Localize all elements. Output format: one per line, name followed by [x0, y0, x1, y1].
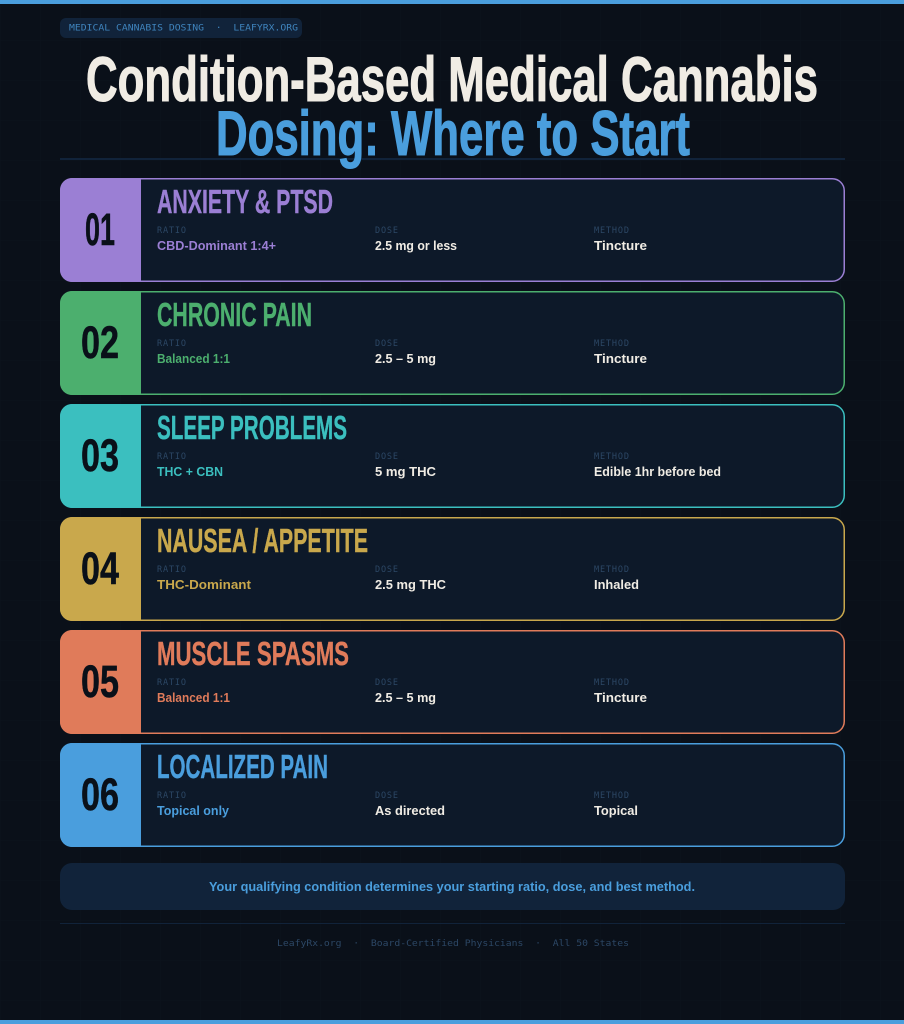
- panel: anxiety & ptsd: RATIO: [157, 226, 186, 236]
- panel: muscle spasms: Balanced 1:1: [157, 690, 230, 705]
- panel: muscle spasms: DOSE: [375, 678, 398, 688]
- panel: chronic pain: METHOD: [594, 339, 629, 349]
- panel: anxiety & ptsd: 01: [85, 204, 115, 255]
- panel: sleep problems: [60, 404, 844, 508]
- header tag pill: [60, 18, 302, 38]
- panel: nausea / appetite: [60, 517, 844, 621]
- panel: muscle spasms: Tincture: [594, 690, 647, 705]
- panel: localized pain: Topical only: [157, 803, 230, 818]
- panel: sleep problems: METHOD: [594, 452, 629, 462]
- panel: muscle spasms: METHOD: [594, 678, 629, 688]
- panel: anxiety & ptsd: ANXIETY & PTSD: [157, 184, 333, 221]
- panel: anxiety & ptsd: 2.5 mg or less: [375, 238, 457, 253]
- panel: chronic pain: CHRONIC PAIN: [157, 297, 312, 334]
- panel: localized pain: Topical: [594, 803, 638, 818]
- panel: sleep problems: THC + CBN: [157, 464, 223, 479]
- panel: muscle spasms: [60, 630, 844, 734]
- panel: chronic pain: Tincture: [594, 351, 647, 366]
- panel: chronic pain: DOSE: [375, 339, 398, 349]
- panel: chronic pain: [60, 291, 844, 395]
- title: Dosing: Where to Start: [216, 99, 690, 169]
- panel: sleep problems: DOSE: [375, 452, 398, 462]
- panel: chronic pain: 2.5 – 5 mg: [375, 351, 436, 366]
- footer: LeafyRx.org · Board-Certified Physicians · All 50 States: [277, 939, 629, 949]
- title: [86, 45, 818, 169]
- panel: nausea / appetite: NAUSEA / APPETITE: [157, 523, 368, 560]
- callout: [60, 863, 845, 910]
- panel: localized pain: METHOD: [594, 791, 629, 801]
- panel: nausea / appetite: THC-Dominant: [157, 577, 252, 592]
- panel: chronic pain: 02: [81, 317, 119, 368]
- panel: nausea / appetite: 2.5 mg THC: [375, 577, 446, 592]
- panel: nausea / appetite: METHOD: [594, 565, 629, 575]
- panel: nausea / appetite: DOSE: [375, 565, 398, 575]
- panel: localized pain: [60, 743, 844, 847]
- panel: sleep problems: 5 mg THC: [375, 464, 436, 479]
- callout: Your qualifying condition determines your starting ratio, dose, and best method.: [209, 879, 695, 894]
- panel: anxiety & ptsd: CBD-Dominant 1:4+: [157, 238, 276, 253]
- panel: nausea / appetite: 04: [81, 543, 119, 594]
- panel: localized pain: RATIO: [157, 791, 186, 801]
- panel: localized pain: As directed: [375, 803, 445, 818]
- panel: sleep problems: Edible 1hr before bed: [594, 464, 721, 479]
- panel: anxiety & ptsd: DOSE: [375, 226, 398, 236]
- panel: anxiety & ptsd: Tincture: [594, 238, 647, 253]
- panel: nausea / appetite: RATIO: [157, 565, 186, 575]
- panel: anxiety & ptsd: [60, 178, 844, 282]
- panel: sleep problems: 03: [81, 430, 119, 481]
- panel: sleep problems: SLEEP PROBLEMS: [157, 410, 347, 447]
- panel: muscle spasms: MUSCLE SPASMS: [157, 636, 349, 673]
- panel: nausea / appetite: Inhaled: [594, 577, 639, 592]
- panel: muscle spasms: RATIO: [157, 678, 186, 688]
- panel: localized pain: DOSE: [375, 791, 398, 801]
- panel: localized pain: 06: [81, 769, 119, 820]
- header tag pill: MEDICAL CANNABIS DOSING · LEAFYRX.ORG: [69, 24, 298, 34]
- panel: sleep problems: RATIO: [157, 452, 186, 462]
- panel: chronic pain: RATIO: [157, 339, 186, 349]
- panel: chronic pain: Balanced 1:1: [157, 351, 230, 366]
- panel: localized pain: LOCALIZED PAIN: [157, 749, 328, 786]
- panel: muscle spasms: 05: [81, 656, 119, 707]
- panel: muscle spasms: 2.5 – 5 mg: [375, 690, 436, 705]
- panel: anxiety & ptsd: METHOD: [594, 226, 629, 236]
